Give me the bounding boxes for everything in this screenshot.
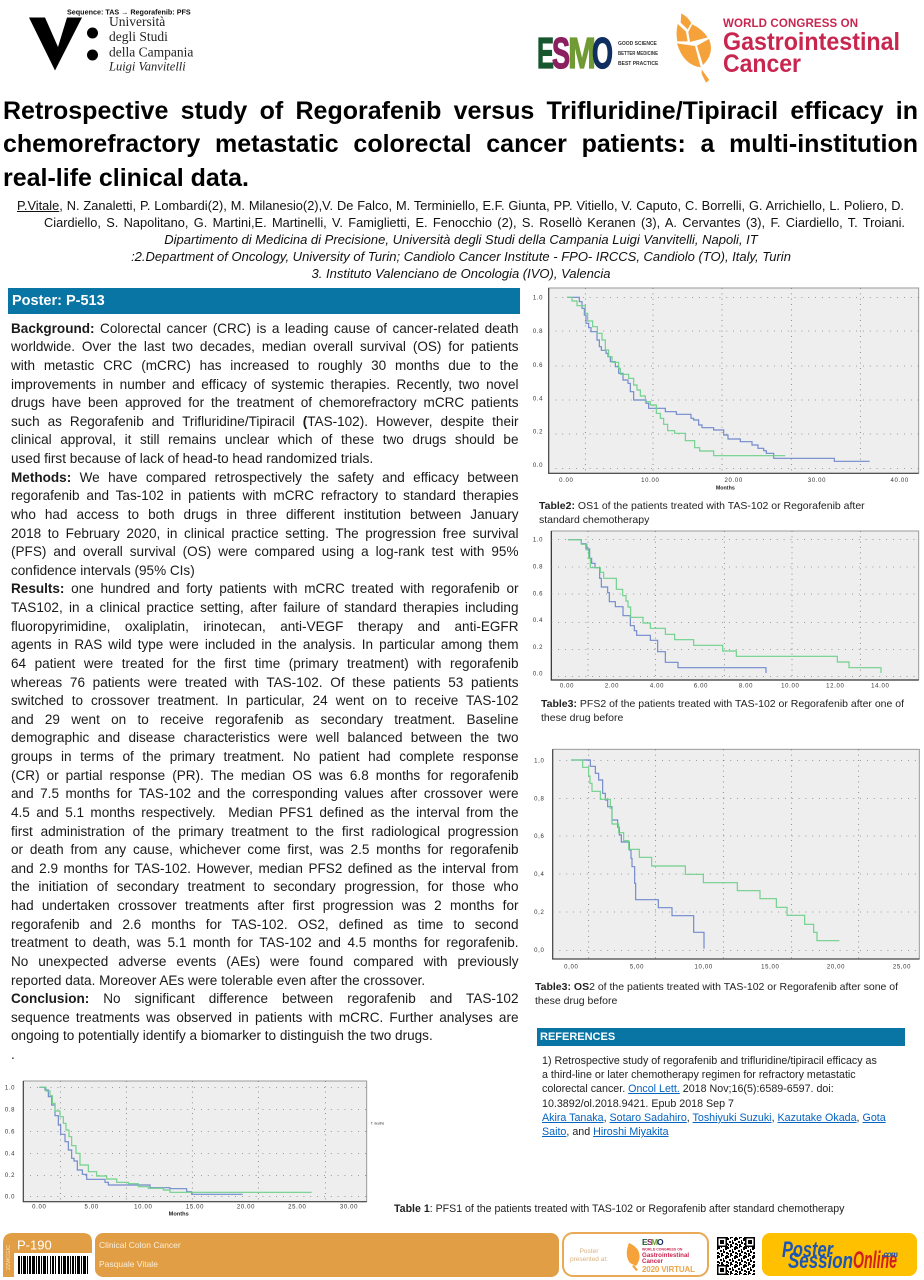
logo: PosterSessionOnline: Poster: [782, 1237, 834, 1262]
y axis labels: 0.8: [533, 564, 543, 570]
caption: table 2: [539, 500, 865, 526]
text block: abstract: regorafenib and Tas-102 in patients with mCRC refractory to standard therapies: [11, 488, 518, 503]
text block: abstract: 2018 to February 2020, in clinical practice setting. The progression free survival: [11, 526, 518, 541]
chart: OS2 Kaplan-Meier curves: [534, 748, 920, 970]
text block: abstract: fluoropyrimidine, oxaliplatin, irinotecan, anti-VEGF therapy and anti-EGFR: [11, 619, 518, 634]
caption: table 3 PFS2: Table3: PFS2 of the patients treated with TAS-102 or Regorafenib after one of: [541, 698, 904, 710]
x axis labels: 40.00: [890, 478, 909, 484]
text block: abstract: TAS102, in a clinical practice setting, after failure of standard therapies including: [11, 600, 518, 615]
text block: abstract: 4.5 and 5.1 months respectively. Median PFS1 defined as the interval from the: [11, 805, 518, 820]
logo: PosterSessionOnline: [762, 1233, 917, 1276]
x axis labels: 10.00: [781, 684, 800, 690]
x axis labels: 0.00: [32, 1204, 47, 1210]
x axis labels: 12.00: [826, 684, 845, 690]
QR code: [717, 1237, 755, 1275]
text block: abstract: drugs have been approved for the treatment of chemorefractory mCRC patients: [11, 395, 518, 410]
congress wordmark: Cancer: [723, 50, 801, 78]
y axis labels: 0.2: [533, 430, 543, 436]
V mark: [29, 18, 98, 70]
y axis labels: 0,8: [534, 796, 545, 802]
y axis labels: 0.4: [5, 1151, 15, 1157]
text block: abstract: whereas 76 patients were treated with TAS-102. Of these patients 53 patients: [11, 675, 518, 690]
y axis labels: 0.4: [533, 618, 543, 624]
text block: abstract: sequence treatments was observed in patients with mCRC. Further analyses are: [11, 1010, 518, 1025]
text block: abstract: ongoing to potentially identify a biomarker to distinguish the two drugs.: [11, 1028, 433, 1043]
text block: abstract: switched to crossover treatment. In particular, 24 went on to receive TAS-102: [11, 693, 518, 708]
footer: poster presented at badge: [562, 1232, 709, 1277]
x axis title: Months: [169, 1212, 189, 1218]
logo: PosterSessionOnline: Session: [788, 1248, 853, 1273]
authors and affiliations: Ciardiello, S. Napolitano, G. Martini,E. Martinelli, V. Famiglietti, E. Fenocchio (2), S. Rosellò Keranen (3), A. Cervantes (3), F. Ciardiello, T. Troiani.: [44, 215, 905, 230]
title: Retrospective study of Regorafenib versus Trifluridine/Tipiracil efficacy in: [3, 97, 918, 125]
x axis labels: [559, 478, 909, 484]
text block: abstract: .: [11, 1047, 15, 1062]
text block: abstract: who had access to both drugs in three different institution between January: [11, 507, 518, 522]
y axis labels: 0,0: [534, 948, 545, 954]
heading: poster number: Poster: P-513: [12, 293, 105, 309]
sequence note: Sequence: TAS → Regorafenib: PFS: [67, 8, 191, 16]
authors and affiliations: 3. Instituto Valenciano de Oncologia (IVO), Valencia: [312, 266, 610, 281]
logo: ESMO: BETTER MEDICINE: [618, 51, 659, 57]
logo: PosterSessionOnline: .com: [882, 1250, 898, 1259]
text block: abstract: [11, 321, 518, 1062]
text block: abstract: used first because of lack of head-to head randomized trials.: [11, 451, 373, 466]
x axis title: Months: [716, 486, 735, 492]
text block: abstract: Results: one hundred and forty patients with mCRC treated with regorafenib or: [11, 581, 518, 596]
x axis labels: 30.00: [340, 1204, 358, 1210]
mini congress wordmark: Gastrointestinal: [642, 1252, 689, 1259]
y axis labels: 1.0: [5, 1085, 15, 1091]
presenter: Pasquale Vitale: [99, 1259, 158, 1269]
y axis labels: 0.6: [533, 591, 543, 597]
text block: abstract: first administration of the primary treatment to the first radiological progression: [11, 824, 518, 839]
text block: abstract: regorafenib and 2.6 months for TAS-102. OS2, defined as time to second: [11, 917, 518, 932]
mini congress wordmark: WORLD CONGRESS ON: [642, 1248, 683, 1252]
curve: TAS-102: [568, 540, 766, 673]
text block: abstract: improvements in number and efficacy of systemic therapies. Recently, two novel: [11, 377, 518, 392]
logo: ESMO: [537, 30, 659, 75]
curve: TAS-102: [567, 297, 870, 461]
congress wordmark: WORLD CONGRESS ON: [723, 18, 858, 30]
y axis labels: 0.4: [533, 396, 543, 402]
authors and affiliations: [17, 198, 905, 281]
text block: abstract: Methods: We have compared retrospectively the safety and efficacy between: [11, 470, 518, 485]
curve: Regorafenib: [568, 540, 881, 673]
text block: abstract: worldwide. Over the last two decades, median overall survival (OS) for patients: [11, 339, 518, 354]
x axis labels: 8.00: [739, 684, 753, 690]
text block: abstract: confidence intervals (95% CIs): [11, 563, 195, 578]
congress wordmark: Gastrointestinal: [723, 28, 900, 56]
x axis labels: 4.00: [650, 684, 664, 690]
x axis labels: [32, 1204, 358, 1210]
caption: table 1: Table 1: PFS1 of the patients treated with TAS-102 or Regorafenib after standard chemotherapy: [394, 1203, 844, 1215]
text block: references: Akira Tanaka, Sotaro Sadahiro, Toshiyuki Suzuki, Kazutake Okada, Gota: [542, 1112, 886, 1124]
text block: abstract: the initiation of secondary treatment to secondary progression, for those who: [11, 879, 518, 894]
y axis labels: 0,2: [534, 910, 545, 916]
mini ESMO: S: [647, 1237, 653, 1247]
university name: degli Studi: [109, 29, 168, 44]
virtual label: 2020 VIRTUAL: [642, 1265, 695, 1274]
x axis labels: 20.00: [237, 1204, 255, 1210]
x axis labels: 5,00: [630, 964, 644, 970]
footer: session and author panel: [95, 1233, 559, 1277]
curve: TAS-102: [39, 1087, 243, 1194]
mini ESMO: E: [642, 1237, 648, 1247]
heading: poster number: [8, 288, 520, 314]
caption: table 3 OS2: [535, 981, 898, 1006]
presented at text: Poster: [580, 1248, 599, 1255]
x axis labels: 5.00: [84, 1204, 99, 1210]
text block: abstract: such as Regorafenib and Trifluridine/Tipiracil (TAS-102). However, despite their: [11, 414, 518, 429]
y axis labels: 0,4: [534, 872, 545, 878]
x axis labels: 10.00: [134, 1204, 153, 1210]
y axis labels: 0.8: [5, 1107, 15, 1113]
caption: table 2: standard chemotherapy: [539, 514, 649, 526]
text block: abstract: and 29 went on to receive regorafenib as secondary treatment. Baseline: [11, 712, 518, 727]
curve: Regorafenib: [571, 760, 839, 941]
x axis labels: 15.00: [186, 1204, 204, 1210]
x axis labels: 10.00: [641, 478, 660, 484]
y axis labels: 0.8: [533, 329, 543, 335]
x axis labels: 14.00: [871, 684, 890, 690]
icon: orange leaf: [677, 13, 711, 83]
chart: PFS2 Kaplan-Meier curves: [533, 530, 920, 690]
curve: TAS-102: [571, 760, 704, 949]
y axis labels: 0.6: [5, 1129, 15, 1135]
text block: references: [542, 1055, 886, 1138]
text block: abstract: No unexpected adverse events (AEs) were found compared with previously: [11, 954, 518, 969]
y axis labels: 1,0: [534, 758, 545, 764]
mini leaf: [627, 1243, 640, 1271]
logo: Università degli Studi della Campania Luigi Vanvitelli: [29, 8, 194, 74]
x axis labels: 0,00: [564, 964, 579, 970]
university name: Luigi Vanvitelli: [108, 60, 186, 74]
x axis labels: 2.00: [605, 684, 619, 690]
text block: abstract: or death from any cause, whichever come first, was 2.5 months for regorafenib: [11, 842, 518, 857]
authors and affiliations: Dipartimento di Medicina di Precisione, Università degli Studi della Campania Luigi Vanvitelli, Napoli, IT: [164, 232, 758, 247]
title: [3, 97, 918, 192]
caption: table 3 PFS2: these drug before: [541, 712, 623, 724]
y axis labels: [534, 758, 545, 954]
authors and affiliations: P.Vitale, N. Zanaletti, P. Lombardi(2), M. Milanesio(2),V. De Falco, M. Terminiello, E.F. Giunta, PP. Vitiello, V. Caputo, C. Borrelli, G. Arrichiello, L. Poliero, D.: [17, 198, 904, 213]
mini congress wordmark: [642, 1248, 689, 1265]
text block: references: 1) Retrospective study of regorafenib and trifluridine/tipiracil efficacy as: [542, 1055, 877, 1067]
logo: World Congress on Gastrointestinal Cancer: [676, 13, 900, 82]
presented at text: [570, 1248, 608, 1263]
y axis labels: 0.0: [533, 463, 543, 469]
chart: PFS1 Kaplan-Meier curves: [5, 1080, 385, 1218]
text block: references: Saito, and Hiroshi Miyakita: [542, 1126, 669, 1138]
caption: table 3 PFS2: [541, 698, 904, 724]
barcode: [18, 1256, 88, 1274]
x axis labels: 30.00: [808, 478, 826, 484]
x axis labels: [560, 684, 890, 690]
x axis labels: [564, 964, 911, 970]
x axis labels: 25,00: [893, 964, 911, 970]
text block: references: colorectal cancer. Oncol Lett. 2018 Nov;16(5):6589-6597. doi:: [542, 1083, 834, 1095]
text block: abstract: Conclusion: No significant difference between regorafenib and TAS-102: [11, 991, 518, 1006]
text block: abstract: reported data. Moreover AEs were tolerable even after the crossover.: [11, 973, 425, 988]
title: real-life clinical data.: [3, 164, 249, 192]
text block: references: a third-line or later chemotherapy regimen for refractory metastatic: [542, 1069, 856, 1081]
y axis labels: 0.6: [533, 363, 543, 369]
mini congress wordmark: Cancer: [642, 1258, 664, 1265]
x axis labels: 15,00: [761, 964, 780, 970]
logo: ESMO: BEST PRACTICE: [618, 61, 659, 67]
caption: table 3 OS2: Table3: OS2 of the patients treated with TAS-102 or Regorafenib after sone of: [535, 981, 898, 993]
logo: ESMO: GOOD SCIENCE: [618, 41, 658, 47]
text block: abstract: 64 patient were treated for the first time (primary treatment) with regorafenib: [11, 656, 518, 671]
university name: Università: [109, 14, 165, 29]
title: chemorefractory metastatic colorectal cancer patients: a multi-institution: [3, 130, 918, 158]
y axis labels: 0.0: [533, 672, 543, 678]
heading: references: [537, 1028, 905, 1046]
y axis labels: 1.0: [533, 295, 543, 301]
vertical code: 22WCGIC: [6, 1245, 12, 1270]
x axis labels: 0.00: [560, 684, 574, 690]
congress wordmark: [723, 18, 900, 78]
text block: abstract: (PFS) and overall survival (OS) were compared using a log-rank test with 95%: [11, 544, 518, 559]
university name: della Campania: [109, 44, 193, 60]
x axis labels: 0.00: [559, 478, 574, 484]
text block: abstract: and 7.5 months for TAS-102 and the corresponding values after crossover were: [11, 786, 518, 801]
text block: abstract: (CR) or partial response (PR). The median OS was 6.8 months for regorafenib: [11, 768, 518, 783]
mini ESMO: M: [651, 1237, 658, 1247]
text block: abstract: agents in RAS wild type were included in the analysis. In particular among them: [11, 637, 518, 652]
heading: references: REFERENCES: [540, 1031, 615, 1043]
caption: table 2: Table2: OS1 of the patients treated with TAS-102 or Regorafenib after: [539, 500, 865, 512]
y axis labels: 0.2: [5, 1173, 15, 1179]
curve: Regorafenib: [39, 1087, 312, 1192]
x axis labels: 20.00: [724, 478, 743, 484]
y axis labels: [5, 1085, 15, 1200]
curve: Regorafenib: [567, 297, 785, 456]
presented at text: presented at:: [570, 1256, 608, 1263]
text block: references: 10.3892/ol.2018.9421. Epub 2018 Sep 7: [542, 1098, 734, 1110]
poster code: P-190: [17, 1238, 52, 1252]
y axis labels: 0,6: [534, 834, 545, 840]
mini ESMO: O: [657, 1237, 664, 1247]
text block: abstract: with metastic CRC (mCRC) has increased to roughly 30 months due to the: [11, 358, 518, 373]
university name: [108, 14, 193, 74]
y axis labels: [533, 295, 543, 469]
x axis labels: 10,00: [694, 964, 713, 970]
caption: table 3 OS2: these drug before: [535, 994, 617, 1006]
text block: abstract: and 2.9 months for TAS-102. However, median PFS2 defined as the interval from: [11, 861, 518, 876]
chart: OS1 Kaplan-Meier curves: [533, 288, 920, 492]
text block: abstract: demographic and disease characteristics were well balanced between the two: [11, 730, 518, 745]
text block: abstract: Background: Colorectal cancer (CRC) is a leading cause of cancer-related death: [11, 321, 518, 336]
text block: abstract: treatment to death, was 5.1 month for TAS-102 and 4.5 months for regorafenib.: [11, 935, 518, 950]
y axis labels: 0.2: [533, 645, 543, 651]
x axis labels: 6.00: [694, 684, 708, 690]
session name: Clinical Colon Cancer: [99, 1240, 181, 1250]
x axis labels: 20,00: [827, 964, 845, 970]
x axis labels: 25.00: [288, 1204, 307, 1210]
text block: abstract: clinical approval, it still remains unclear which of these two drugs should be: [11, 432, 518, 447]
text block: abstract: had undertaken crossover treatments after first progression was 2 months for: [11, 898, 518, 913]
text block: abstract: groups in terms of the primary treatment. No patient had complete response: [11, 749, 518, 764]
footer: poster id tab: [3, 1233, 92, 1277]
mini ESMO: [642, 1237, 664, 1247]
authors and affiliations: :2.Department of Oncology, University of Turin; Candiolo Cancer Institute - FPO- IRCCS, Candiolo (TO), Italy, Turin: [131, 249, 791, 264]
legend remnant: T: deaths: [371, 1122, 385, 1126]
y axis labels: [533, 538, 543, 678]
y axis labels: 0.0: [5, 1194, 15, 1200]
y axis labels: 1.0: [533, 538, 543, 544]
